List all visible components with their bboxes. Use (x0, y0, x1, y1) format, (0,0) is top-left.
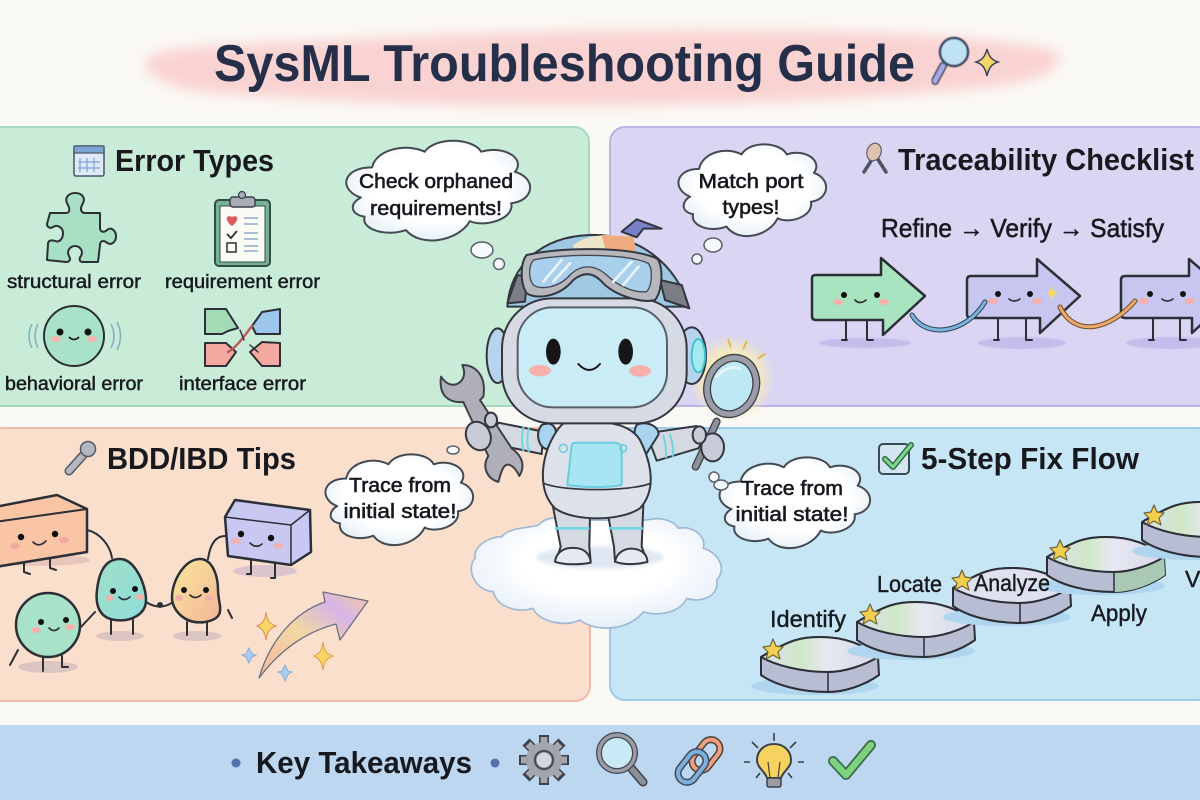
step 5 platform (1132, 502, 1200, 560)
panel: traceability checklist (610, 127, 1200, 406)
blob character: teal (96, 559, 146, 641)
label: analyze: Analyze (974, 570, 1050, 596)
icon: ribbon pin (864, 141, 886, 172)
glow rays (728, 340, 765, 358)
helmet dome (507, 219, 688, 307)
label: requirement error: requirement error (165, 272, 321, 293)
icon: title sparkle (976, 49, 998, 76)
cable: orange connector (1060, 301, 1135, 327)
label: locate: Locate (877, 571, 942, 597)
goggles (522, 249, 661, 301)
wrench (441, 365, 522, 482)
text: refine verify satisfy: Refine → Verify → Satisfy (881, 213, 1164, 243)
connectors between blocks (80, 530, 232, 628)
heading: error types: Error Types (115, 143, 274, 178)
ears (487, 327, 706, 384)
thought bubble: check orphaned requirements: requirements! (370, 197, 502, 220)
magnifier (696, 351, 764, 467)
panel: bdd ibd tips (0, 428, 590, 701)
bullet right (490, 758, 500, 768)
step 3 platform (943, 568, 1071, 626)
body (543, 421, 651, 518)
lens shine (543, 260, 638, 285)
sparkles (242, 612, 333, 681)
step 4 platform (1037, 537, 1165, 595)
title wash (145, 29, 1059, 106)
goggle lens (530, 255, 651, 292)
cable: blue connector (912, 302, 985, 330)
arrow: purple character (967, 259, 1080, 340)
step 2 platform (847, 602, 975, 660)
icon: clipboard (215, 192, 270, 266)
arrow: green character (812, 258, 925, 340)
label: behavioral error: behavioral error (5, 374, 144, 395)
cheek left (529, 365, 551, 376)
label: apply: Apply (1091, 600, 1147, 626)
heading: bdd ibd tips: BDD/IBD Tips (107, 441, 296, 476)
thought bubble: match port types: types! (722, 196, 780, 219)
shadows under arrows (819, 337, 1200, 349)
icon: light bulb (744, 733, 804, 787)
icon: chain link (674, 736, 724, 786)
icon: smiling behavior circle (29, 306, 120, 366)
icon: broken interface pieces (205, 309, 280, 366)
icon: gear (519, 735, 569, 785)
step 1 platform (751, 637, 879, 695)
thought bubble: match port types: Match port (698, 170, 804, 193)
blob character: yellow (172, 559, 221, 641)
thought bubble: trace from initial state right (709, 457, 870, 548)
blob character: green (10, 593, 80, 673)
eye right (618, 339, 633, 365)
left hand (461, 413, 497, 454)
goggle straps (507, 275, 689, 308)
thought bubble: trace from initial state left: Trace from (349, 474, 451, 497)
connector knot (157, 602, 163, 608)
heading: five step fix flow: 5-Step Fix Flow (921, 441, 1140, 476)
robot mascot on cloud (441, 219, 775, 628)
left arm (495, 423, 556, 454)
cheek right (629, 365, 651, 377)
stars on steps (763, 505, 1164, 659)
thought bubble: trace from initial state right: initial state! (736, 503, 848, 526)
right hand (693, 426, 724, 461)
magnifier glow (688, 335, 775, 422)
face screen (518, 307, 667, 407)
legs (553, 505, 647, 564)
arrow: third character (1121, 259, 1200, 340)
heading: key takeaways: Key Takeaways (256, 745, 472, 780)
smile (578, 364, 600, 370)
head shell (502, 298, 687, 423)
label: structural error: structural error (7, 272, 142, 293)
icon: magnifier (599, 735, 643, 782)
icon: calendar (74, 146, 104, 176)
icon: green check (833, 745, 871, 775)
right arm (635, 423, 701, 461)
thought bubble: match port types (678, 144, 826, 264)
thought bubble: trace from initial state right: Trace from (741, 477, 843, 500)
thought bubble: check orphaned requirements: Check orphaned (359, 170, 513, 193)
panel: error types (0, 127, 589, 406)
label: interface error: interface error (179, 374, 307, 395)
icon: check box (879, 444, 911, 474)
bottom band: key takeaways (0, 725, 1200, 800)
arrow: rainbow upward (259, 592, 368, 678)
eye left (546, 339, 561, 365)
thought bubble: trace from initial state left (325, 446, 473, 545)
cloud (471, 518, 721, 628)
icon: puzzle piece (47, 193, 116, 262)
icon: connector tool (69, 442, 96, 471)
title: SysML Troubleshooting Guide (214, 35, 915, 93)
label: identify: Identify (770, 606, 847, 632)
panel: five step fix flow (610, 428, 1200, 700)
icon: title magnifier (935, 38, 968, 81)
thought bubble: trace from initial state left: initial state! (344, 500, 456, 523)
block character: purple (225, 500, 311, 578)
thought bubble: check orphaned requirements (346, 141, 530, 270)
bullet left (232, 758, 240, 768)
block character: peach (0, 495, 90, 574)
